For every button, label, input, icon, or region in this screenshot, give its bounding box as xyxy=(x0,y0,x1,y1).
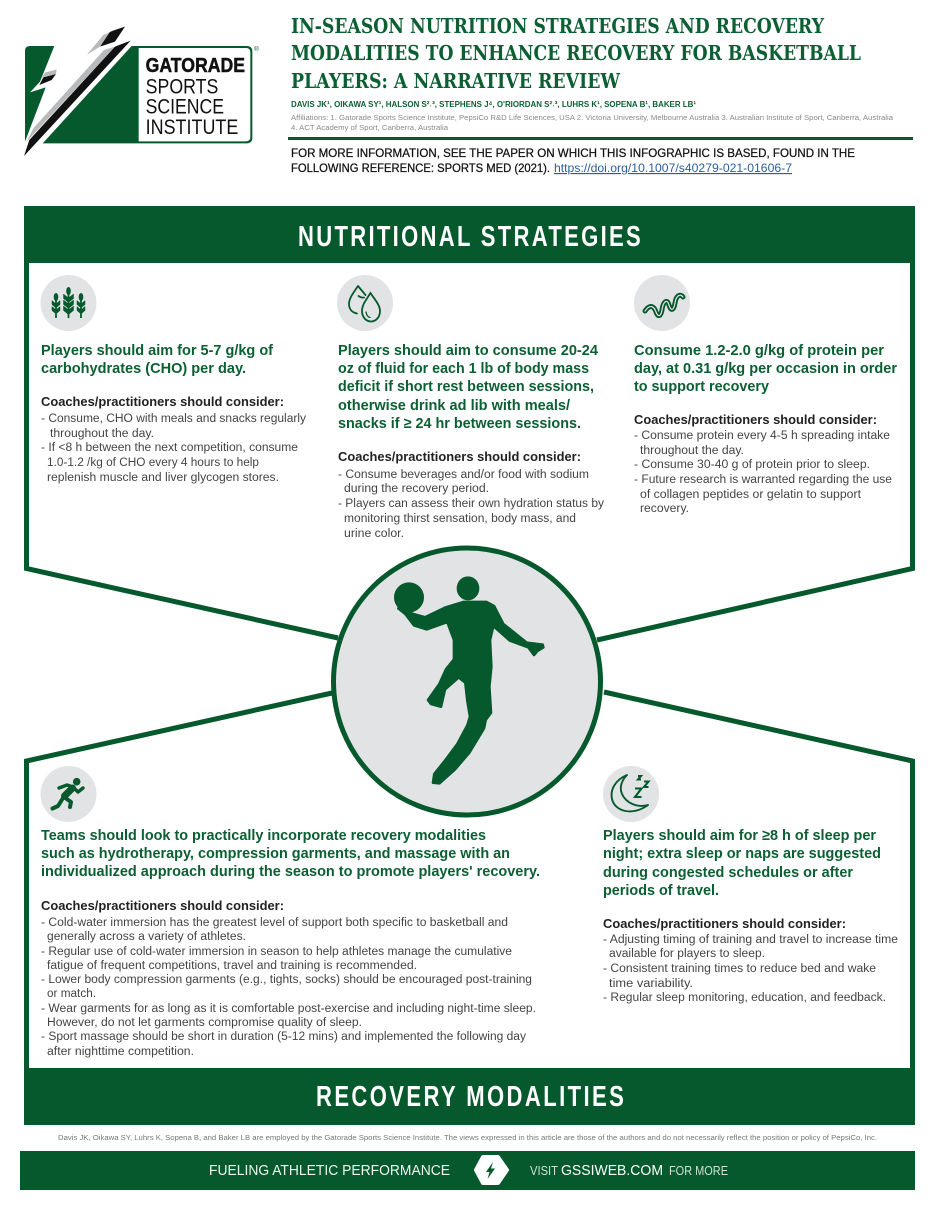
text block: sleep guidance: time variability. xyxy=(609,978,693,990)
text block: recovery guidance: or match. xyxy=(47,988,96,1000)
heading: carbohydrate target: carbohydrates (CHO) per day. xyxy=(41,360,246,377)
text block: recovery guidance: - Sport massage should be short in duration (5-12 mins) and implemented the following day xyxy=(41,1031,526,1043)
text block: protein guidance: - Future research is warranted regarding the use xyxy=(634,474,892,486)
footer bar xyxy=(20,1151,915,1190)
text block: sleep guidance: available for players to sleep. xyxy=(609,948,765,960)
footer bar: FOR MORE xyxy=(669,1163,728,1178)
text block: fluid guidance: - Consume beverages and/or food with sodium xyxy=(338,469,589,481)
subheading: Coaches/practitioners should consider: xyxy=(603,916,846,931)
panel: carbohydrates xyxy=(40,275,306,484)
affiliations: Affiliations: 1. Gatorade Sports Science Institute, PepsiCo R&D Life Sciences, USA 2. Victoria University, Melbourne Australia 3. Australian Institute of Sport, Canberra, Australia xyxy=(291,113,894,122)
authors: DAVIS JK¹, OIKAWA SY¹, HALSON S²˒³, STEPHENS J⁴, O'RIORDAN S²˒³, LUHRS K¹, SOPENA B¹, BAKER LB¹ xyxy=(291,99,696,109)
icon: water drops xyxy=(337,275,393,331)
panel: recovery modalities xyxy=(40,766,540,1058)
subheading: Coaches/practitioners should consider: xyxy=(41,394,284,409)
reference note xyxy=(291,147,855,175)
reference note: FOR MORE INFORMATION, SEE THE PAPER ON WHICH THIS INFOGRAPHIC IS BASED, FOUND IN THE xyxy=(291,147,855,160)
text block: carbohydrate guidance: - If <8 h between the next competition, consume xyxy=(41,442,298,454)
heading: protein target xyxy=(634,342,897,395)
central circle with basketball player xyxy=(334,548,600,815)
text block: carbohydrate guidance: - Consume, CHO with meals and snacks regularly xyxy=(41,413,306,425)
banner: recovery modalities: RECOVERY MODALITIES xyxy=(316,1081,624,1113)
reference note: FOLLOWING REFERENCE: SPORTS MED (2021). xyxy=(291,162,550,175)
banner: recovery modalities xyxy=(24,1068,915,1125)
heading: protein target: Consume 1.2-2.0 g/kg of protein per xyxy=(634,342,884,359)
disclaimer: Davis JK, Oikawa SY, Luhrs K, Sopena B, and Baker LB are employed by the Gatorade Sports Science Institute. The views expressed in this article are those of the authors and do not necessarily reflect the position or policy of PepsiCo, Inc. xyxy=(58,1133,877,1142)
banner: nutritional strategies: NUTRITIONAL STRATEGIES xyxy=(298,221,641,253)
footer bar: FUELING ATHLETIC PERFORMANCE xyxy=(209,1162,450,1179)
text block: recovery guidance: fatigue of frequent competitions, travel and training is recommended. xyxy=(47,960,417,972)
logo: Gatorade Sports Science Institute: SCIENCE xyxy=(146,96,224,119)
heading: fluid target: snacks if ≥ 24 hr between sessions. xyxy=(338,415,581,432)
text block: protein guidance xyxy=(634,430,892,515)
logo: Gatorade Sports Science Institute: SPORTS xyxy=(146,75,218,98)
heading: protein target: day, at 0.31 g/kg per occasion in order xyxy=(634,360,897,377)
text block: protein guidance: recovery. xyxy=(640,503,689,515)
panel: fluid xyxy=(337,275,604,540)
title: PLAYERS: A NARRATIVE REVIEW xyxy=(291,69,621,93)
footer bar: GSSIWEB.COM xyxy=(561,1163,663,1179)
text block: protein guidance: of collagen peptides or gelatin to support xyxy=(640,489,862,501)
text block: protein guidance: throughout the day. xyxy=(640,445,744,457)
icon: basketball player silhouette xyxy=(395,578,543,783)
text block: sleep guidance: - Adjusting timing of training and travel to increase time xyxy=(603,934,898,946)
reference note: https://doi.org/10.1007/s40279-021-01606-7 xyxy=(554,162,792,175)
text block: sleep guidance xyxy=(603,934,898,1004)
logo: Gatorade Sports Science Institute: INSTITUTE xyxy=(146,116,238,139)
heading: sleep target xyxy=(603,827,881,899)
heading: fluid target: Players should aim to consume 20-24 xyxy=(338,342,599,359)
text block: fluid guidance xyxy=(338,469,604,540)
text block: fluid guidance: urine color. xyxy=(344,528,404,540)
text block: protein guidance: - Consume protein every 4-5 h spreading intake xyxy=(634,430,890,442)
text block: recovery guidance: - Lower body compression garments (e.g., tights, socks) should be encouraged post-training xyxy=(41,974,532,986)
footer bar: VISIT xyxy=(530,1163,558,1178)
text block: recovery guidance: - Cold-water immersion has the greatest level of support both specific to basketball and xyxy=(41,917,508,929)
heading: recovery modalities: Teams should look to practically incorporate recovery modalities xyxy=(41,827,486,844)
text block: fluid guidance: monitoring thirst sensation, body mass, and xyxy=(344,513,576,525)
heading: fluid target: otherwise drink ad lib with meals/ xyxy=(338,397,571,414)
subheading: Coaches/practitioners should consider: xyxy=(338,449,581,464)
icon: wheat xyxy=(40,275,96,331)
heading: recovery modalities xyxy=(41,827,540,880)
text block: fluid guidance: during the recovery period. xyxy=(344,483,489,495)
affiliations xyxy=(291,113,894,132)
heading: sleep target: night; extra sleep or naps are suggested xyxy=(603,845,881,862)
heading: sleep target: during congested schedules or after xyxy=(603,864,853,881)
heading: recovery modalities: such as hydrotherapy, compression garments, and massage with an xyxy=(41,845,510,862)
logo: Gatorade Sports Science Institute: GATORADE xyxy=(146,55,245,77)
affiliations: 4. ACT Academy of Sport, Canberra, Australia xyxy=(291,123,449,132)
text block: sleep guidance: - Consistent training times to reduce bed and wake xyxy=(603,963,876,975)
heading: carbohydrate target: Players should aim for 5-7 g/kg of xyxy=(41,342,274,359)
text block: carbohydrate guidance xyxy=(41,413,306,484)
heading: fluid target: deficit if short rest between sessions, xyxy=(338,378,594,395)
heading: sleep target: Players should aim for ≥8 h of sleep per xyxy=(603,827,876,844)
icon: runner xyxy=(40,766,96,822)
heading: protein target: to support recovery xyxy=(634,378,770,395)
text block: recovery guidance: - Wear garments for as long as it is comfortable post-exercise and including night-time sleep. xyxy=(41,1003,536,1015)
title xyxy=(291,14,861,93)
text block: carbohydrate guidance: throughout the day. xyxy=(50,428,154,440)
text block: recovery guidance xyxy=(41,917,536,1058)
panel: sleep xyxy=(603,766,898,1004)
heading: recovery modalities: individualized approach during the season to promote players' recovery. xyxy=(41,863,540,880)
text block: carbohydrate guidance: replenish muscle and liver glycogen stores. xyxy=(47,472,279,484)
text block: recovery guidance: generally across a variety of athletes. xyxy=(47,931,246,943)
icon: hexagon bolt xyxy=(476,1157,507,1183)
frame outline xyxy=(26,263,912,1070)
title: IN-SEASON NUTRITION STRATEGIES AND RECOVERY xyxy=(291,14,824,38)
panel: protein xyxy=(634,275,897,515)
heading: carbohydrate target xyxy=(41,342,274,377)
banner: nutritional strategies xyxy=(24,206,915,263)
text block: carbohydrate guidance: 1.0-1.2 /kg of CHO every 4 hours to help xyxy=(47,457,259,469)
text block: protein guidance: - Consume 30-40 g of protein prior to sleep. xyxy=(634,459,870,471)
logo: Gatorade Sports Science Institute xyxy=(24,27,259,156)
heading: fluid target xyxy=(338,342,599,432)
text block: recovery guidance: - Regular use of cold-water immersion in season to help athletes manage the cumulative xyxy=(41,946,512,958)
heading: fluid target: oz of fluid for each 1 lb of body mass xyxy=(338,360,589,377)
subheading: Coaches/practitioners should consider: xyxy=(634,412,877,427)
text block: fluid guidance: - Players can assess their own hydration status by xyxy=(338,498,604,510)
text block: recovery guidance: after nighttime competition. xyxy=(47,1046,194,1058)
text block: recovery guidance: However, do not let garments compromise quality of sleep. xyxy=(47,1017,362,1029)
icon: moon and zzz xyxy=(603,766,659,822)
icon: protein helix xyxy=(634,275,690,331)
text block: sleep guidance: - Regular sleep monitoring, education, and feedback. xyxy=(603,992,886,1004)
logo: Gatorade Sports Science Institute: ® xyxy=(254,45,259,53)
heading: sleep target: periods of travel. xyxy=(603,882,719,899)
subheading: Coaches/practitioners should consider: xyxy=(41,898,284,913)
